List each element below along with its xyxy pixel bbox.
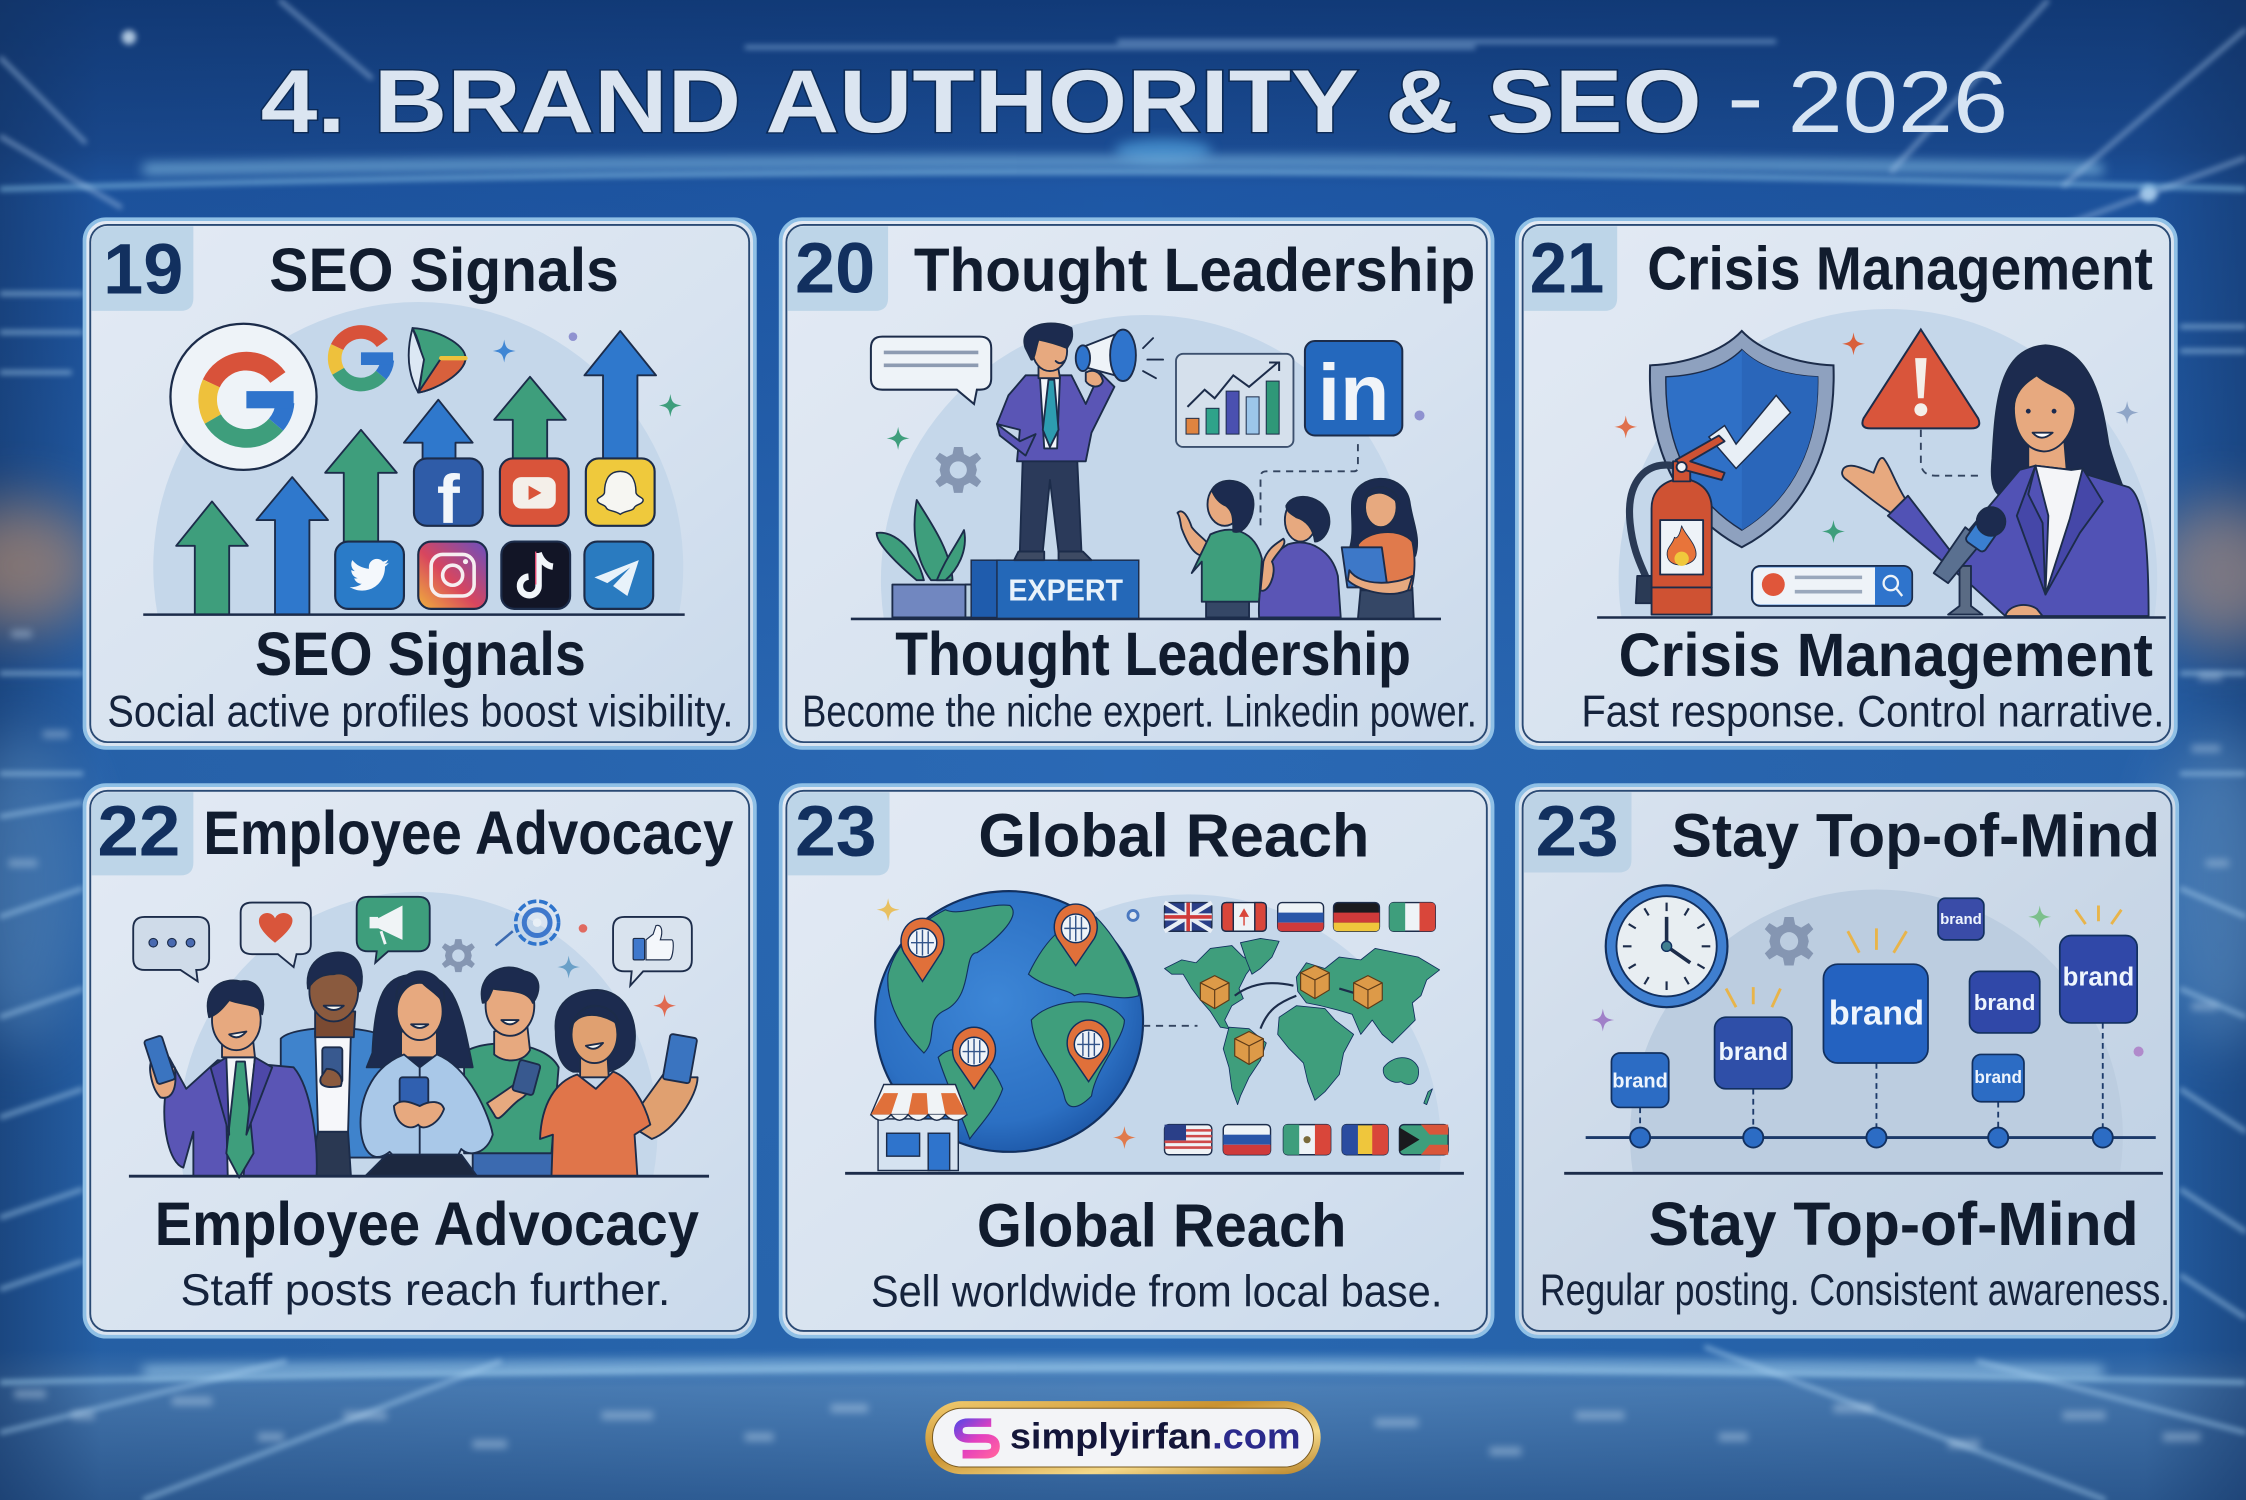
icon: facebook: f [437, 461, 461, 538]
icon: target ring [496, 901, 559, 946]
icon: storefront [871, 1085, 967, 1170]
brand tile labels: brand [1974, 990, 2035, 1015]
description: Fast response. Control narrative. [1581, 687, 2164, 736]
icon: snapchat [586, 458, 655, 526]
backdrop circle [881, 315, 1411, 619]
icon: heart bubble [241, 903, 311, 967]
heading: Thought Leadership [914, 236, 1475, 305]
icon: clock [1606, 885, 1727, 1007]
description: Social active profiles boost visibility. [107, 687, 733, 736]
panel: 22 Employee Advocacy [85, 785, 755, 1337]
icon: search bar [1752, 566, 1912, 606]
logo mark [958, 1423, 996, 1454]
flags: top row [1165, 903, 1435, 931]
heading: Stay Top-of-Mind [1672, 802, 2160, 871]
flags: bottom row [1165, 1125, 1448, 1155]
subheading: Stay Top-of-Mind [1649, 1190, 2139, 1259]
icon: gear [935, 447, 981, 493]
icon: LinkedIn: in [1318, 347, 1389, 437]
panel: 21 Crisis Management [1517, 219, 2176, 748]
description: Become the niche expert. Linkedin power. [802, 687, 1477, 736]
panel: 20 Thought Leadership [781, 219, 1493, 748]
backdrop circle [1619, 309, 2157, 617]
panel: 23 Global Reach [781, 785, 1493, 1337]
backdrop circle [1630, 889, 2123, 1173]
brand tile labels: brand [1612, 1070, 1668, 1092]
subheading: Crisis Management [1619, 621, 2153, 690]
brand tile labels: brand [1974, 1067, 2022, 1087]
podium: EXPERT: EXPERT [1008, 574, 1124, 607]
decorative sparkles [1591, 905, 2144, 1057]
icon: facebook [414, 458, 483, 538]
icon: large Google G badge [170, 324, 317, 470]
icon: shield with check [1650, 331, 1834, 547]
icon: twitter [335, 542, 404, 609]
icon: fire extinguisher [1630, 436, 1725, 615]
icon: megaphone bubble [357, 897, 430, 963]
description: Sell worldwide from local base. [871, 1268, 1442, 1317]
number: 21 [1530, 228, 1604, 308]
icon: thumbs-up bubble [613, 917, 692, 986]
decorative gear and sparkles [442, 924, 676, 1017]
icon: telegram [584, 542, 653, 609]
icon: gear [1765, 917, 1813, 966]
icon: tiktok [501, 542, 570, 609]
heading: Employee Advocacy [203, 799, 733, 868]
footer badge: simplyirfan.com [925, 1401, 1321, 1474]
subheading: Thought Leadership [895, 620, 1411, 689]
icon: play triangle [409, 328, 466, 393]
number: 23 [1536, 791, 1619, 871]
brand tile labels: brand [1940, 911, 1982, 928]
figures: five staff members with phones [144, 952, 698, 1178]
figure: speaker with megaphone [997, 323, 1163, 560]
icon: youtube [500, 458, 569, 526]
number: 23 [795, 791, 877, 871]
decorative sparkles [493, 332, 682, 417]
chart card [1176, 354, 1293, 447]
timeline [1586, 1023, 2156, 1148]
brand tile labels: brand [2063, 964, 2134, 992]
icon: chat bubble with dots [133, 917, 209, 981]
number: 20 [795, 228, 875, 308]
number: 22 [97, 791, 180, 871]
brand tile labels: brand [1718, 1038, 1788, 1066]
backdrop circle [153, 302, 683, 615]
title: 2026 [1788, 53, 2008, 151]
description: Staff posts reach further. [180, 1266, 670, 1315]
icon: speech bubble [871, 337, 991, 404]
icon: plant [877, 500, 991, 617]
website text: simplyirfan .com [1010, 1416, 1301, 1456]
heading: SEO Signals [269, 236, 619, 305]
icon: world map with parcels [1165, 938, 1440, 1105]
title: 4. BRAND AUTHORITY & SEO [261, 52, 1702, 151]
icon: small Google G [335, 332, 393, 385]
subheading: Global Reach [977, 1191, 1346, 1260]
subheading: Employee Advocacy [155, 1190, 699, 1259]
heading: Global Reach [978, 802, 1369, 871]
decorative sparkles [1614, 332, 2139, 543]
brand tile labels [1612, 911, 2134, 1092]
growth arrows [176, 331, 656, 615]
figure: spokeswoman at microphone [1842, 345, 2149, 616]
icon: instagram [418, 542, 487, 609]
podium: EXPERT [971, 560, 1139, 619]
backdrop circle [937, 894, 1441, 1173]
subheading: SEO Signals [255, 620, 586, 689]
icon: warning triangle [1862, 330, 1979, 428]
backdrop circle [179, 892, 657, 1176]
brand tile labels: brand [1829, 994, 1924, 1032]
brand tiles [1611, 898, 2137, 1107]
number: 19 [103, 230, 183, 310]
panel: 23 Stay Top-of-Mind [1517, 785, 2177, 1337]
heading: Crisis Management [1647, 234, 2153, 303]
icon: globe with shop pins [875, 891, 1143, 1152]
panel: 19 SEO Signals [85, 219, 755, 748]
figures: audience [1177, 479, 1417, 619]
icon: LinkedIn [1305, 341, 1402, 437]
